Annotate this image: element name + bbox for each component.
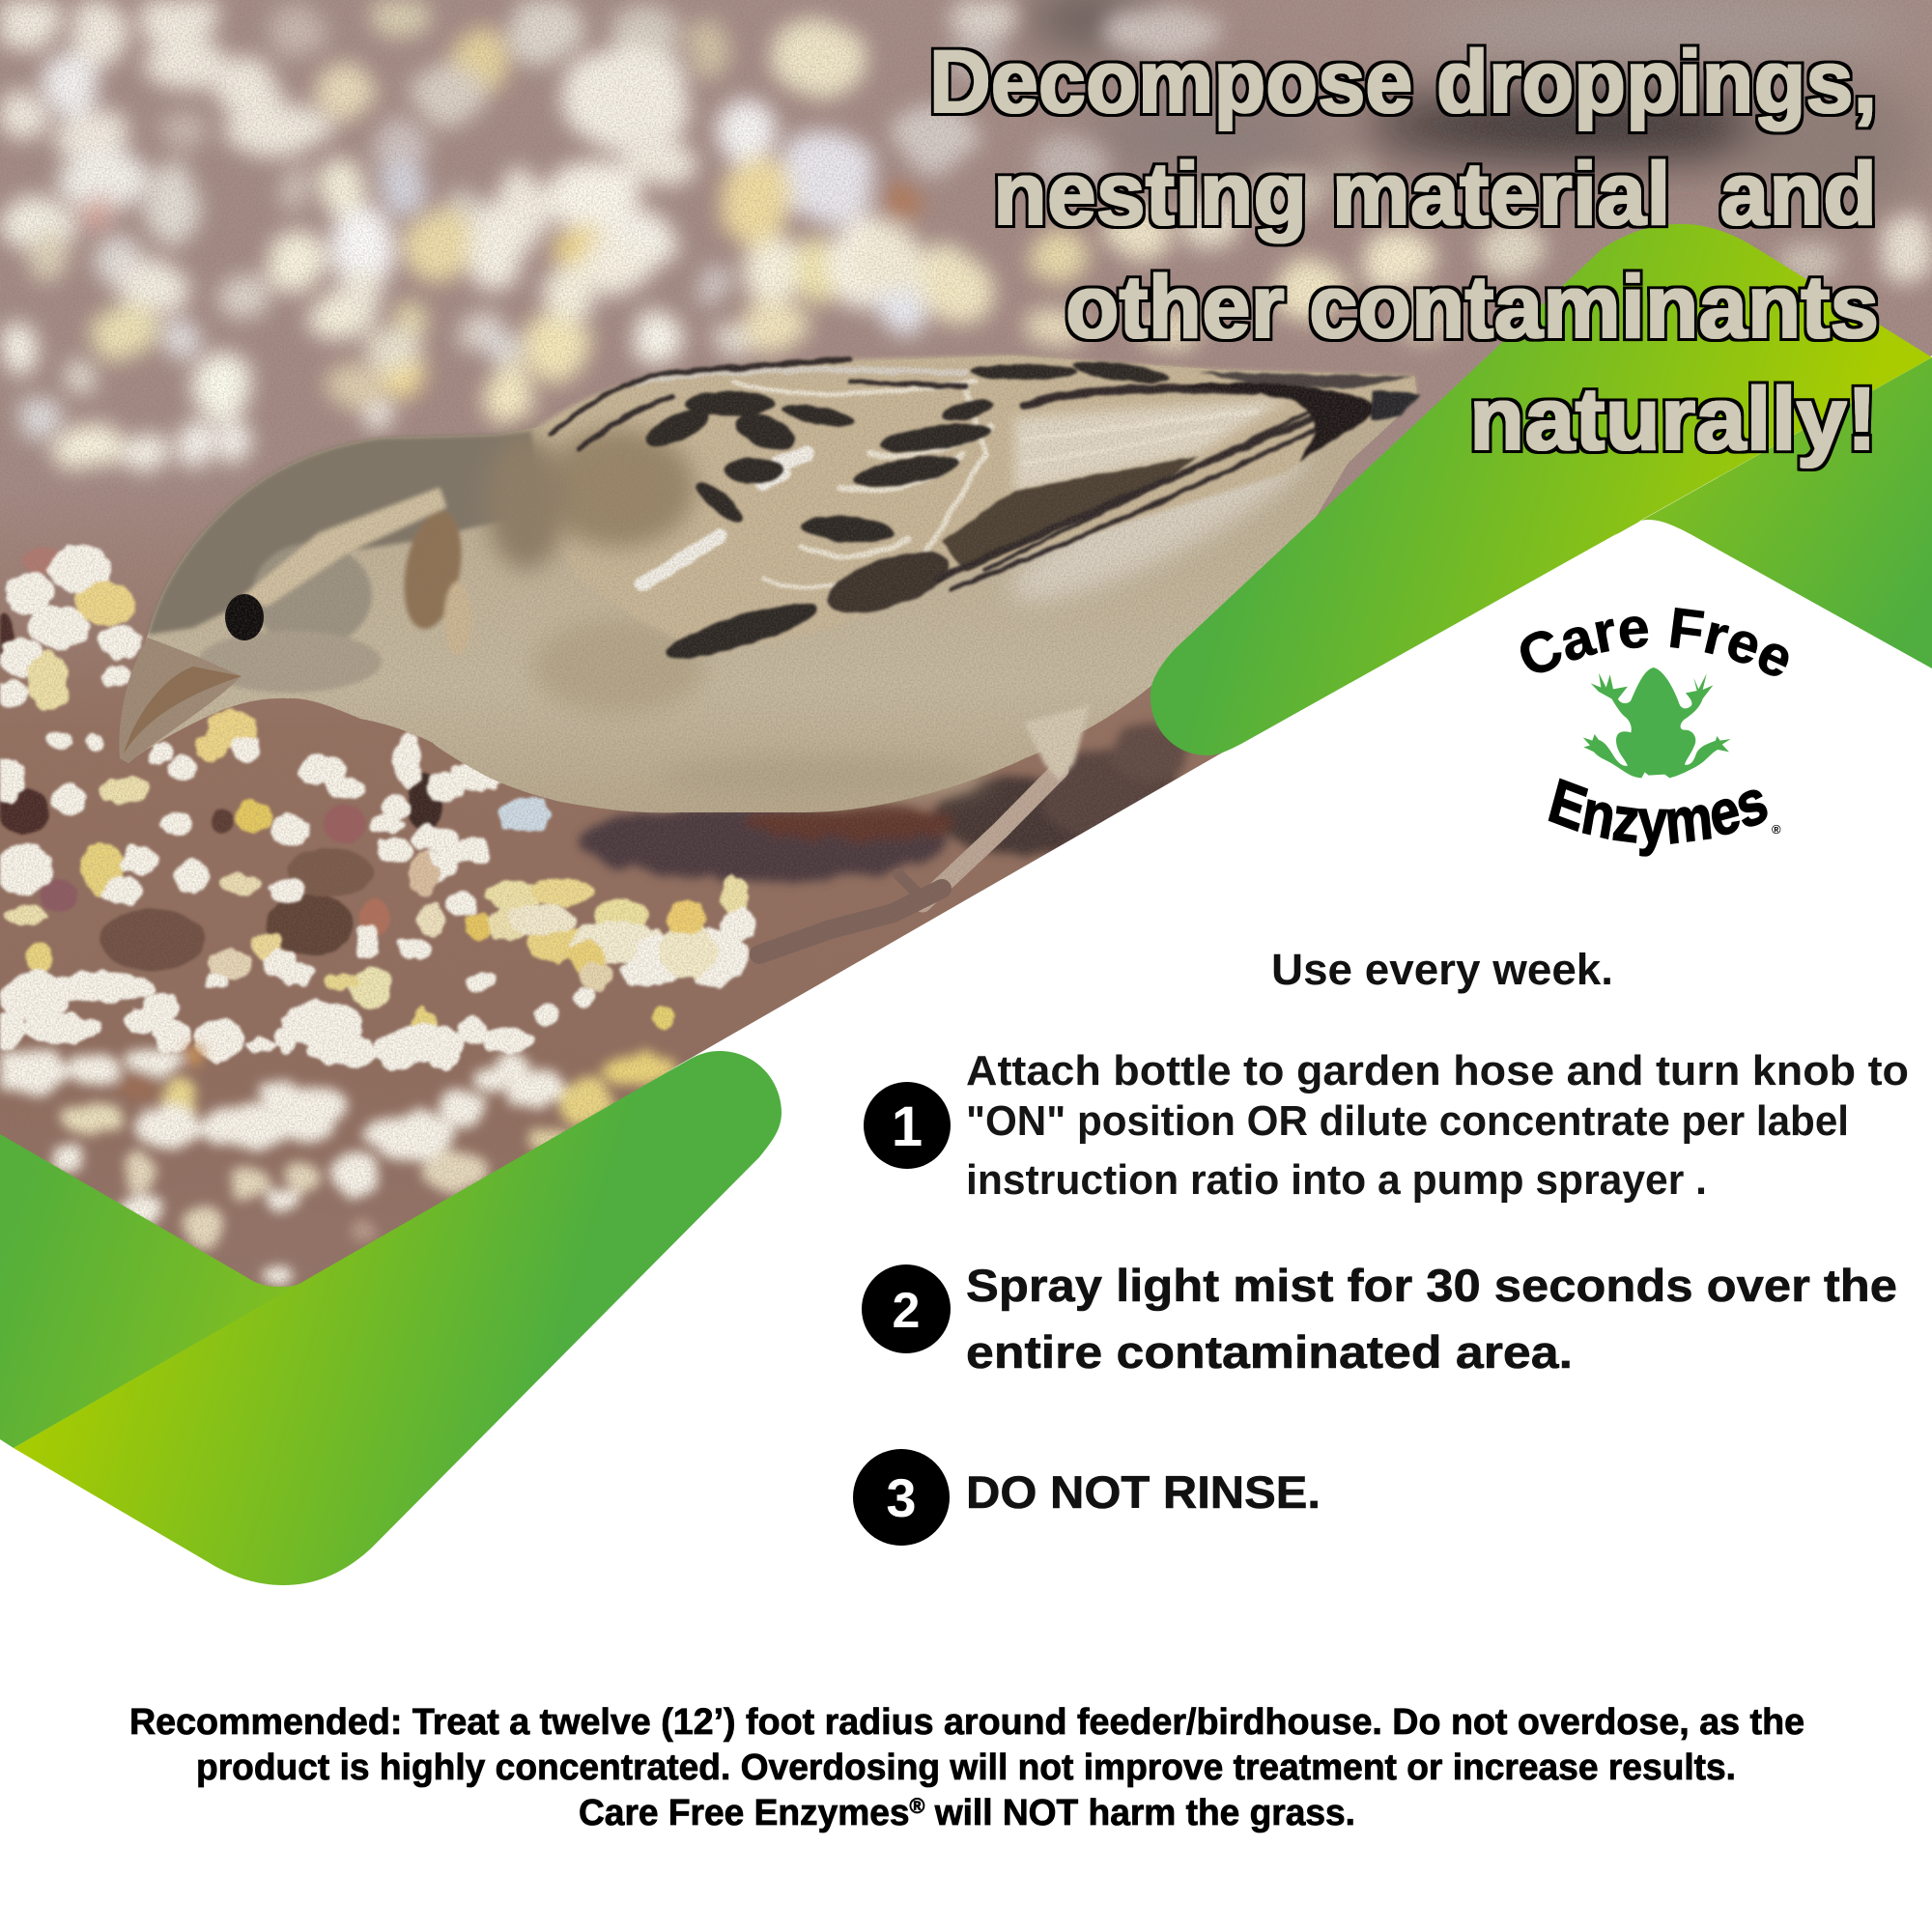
step 2 badge	[862, 1264, 951, 1353]
logo text: Care Free: Care Free	[1520, 607, 1789, 676]
recommendation note: Recommended: Treat a twelve (12’) foot radius around feeder/birdhouse. Do not overdose, as the	[129, 1702, 1804, 1743]
blurred seeds, upper ground	[0, 0, 1932, 471]
recommendation note: Care Free Enzymes	[579, 1793, 918, 1833]
pale primaries	[1014, 398, 1290, 493]
step 1	[864, 1047, 1909, 1204]
dirt clods and nuts	[0, 547, 442, 971]
recommendation note: product is highly concentrated. Overdosing will not improve treatment or increase results.	[196, 1747, 1736, 1788]
back layer	[0, 1134, 319, 1448]
green chevron shape, bottom left	[0, 1051, 781, 1585]
dark feather marks	[640, 356, 1198, 668]
step 1 text: "ON" position OR dilute concentrate per label	[966, 1097, 1849, 1145]
film grain	[0, 0, 1932, 1352]
step 1 badge	[864, 1082, 951, 1169]
recommendation note: ®	[910, 1794, 924, 1818]
head	[148, 430, 551, 693]
step 3 text: DO NOT RINSE.	[966, 1466, 1321, 1518]
headline: Decompose droppings,	[929, 33, 1877, 131]
eye	[225, 594, 264, 640]
feather fringes	[638, 370, 1256, 587]
icon: green frog	[1583, 668, 1731, 778]
subheading: use every week: Use every week.	[1271, 945, 1613, 994]
step 2	[862, 1260, 1897, 1378]
step 2 badge: 2	[893, 1283, 920, 1339]
step 1 text	[966, 1047, 1909, 1204]
blurred far background, upper right	[1024, 0, 1922, 213]
recommendation note: will NOT harm the grass.	[924, 1793, 1355, 1833]
front layer	[14, 1051, 781, 1585]
step 3 badge: 3	[886, 1467, 917, 1528]
leg and foot	[759, 770, 1060, 954]
wing base	[531, 355, 1417, 654]
recommendation note	[129, 1702, 1804, 1833]
step 1 badge: 1	[892, 1095, 923, 1158]
step 3	[853, 1449, 1321, 1546]
logo: Care Free Enzymes	[1520, 607, 1789, 857]
pale flank	[996, 418, 1322, 625]
tail	[1179, 372, 1420, 462]
headline: nesting material and	[993, 145, 1877, 243]
step 2 text	[966, 1260, 1897, 1378]
wing stripes and primaries	[551, 359, 1352, 589]
thigh	[1024, 705, 1090, 781]
step 2 text: entire contaminated area.	[966, 1326, 1573, 1378]
headline: other contaminants	[1065, 258, 1879, 356]
registered mark: ®	[1772, 822, 1781, 837]
front layer	[1151, 224, 1932, 755]
step 3 badge	[853, 1449, 950, 1546]
headline: naturally!	[1469, 370, 1877, 469]
step 1 text: Attach bottle to garden hose and turn knob to	[966, 1047, 1909, 1094]
dark shadow under the bird	[580, 724, 1188, 881]
sharp seeds, middle ground	[0, 545, 756, 1071]
sparrow	[119, 355, 1420, 954]
bird body	[120, 355, 1417, 812]
beak	[119, 638, 242, 763]
back layer	[1615, 357, 1932, 668]
shoulder and neck blend	[541, 428, 696, 548]
headline	[929, 33, 1879, 469]
neck stripe	[396, 506, 469, 634]
step 2 text: Spray light mist for 30 seconds over the	[966, 1260, 1897, 1311]
photo: sparrow feeding on scattered seed	[0, 0, 1932, 1352]
logo text: Enzymes: Enzymes	[1548, 779, 1768, 857]
eyebrow stripe	[242, 488, 446, 607]
step 1 text: instruction ratio into a pump sprayer .	[966, 1156, 1707, 1204]
blurred seeds, foreground	[0, 1047, 677, 1285]
green chevron shape, top right	[1151, 224, 1932, 755]
